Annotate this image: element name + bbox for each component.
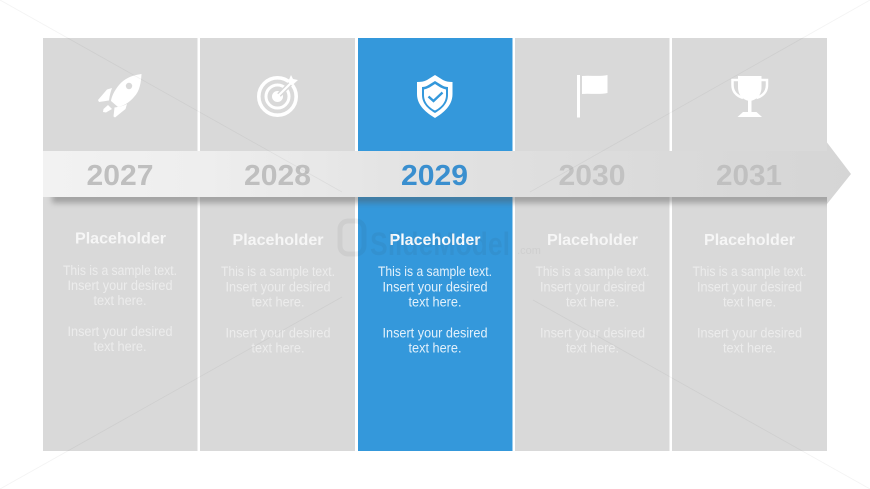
text block: 2031: Insert your desired: [697, 280, 802, 294]
text block: 2028: [221, 232, 335, 356]
watermark: diagonal lines and logo: SlideModel: [370, 226, 510, 262]
text block: 2030: Placeholder: [547, 232, 638, 249]
text block: 2027: text here.: [94, 339, 146, 354]
text block: 2029: text here.: [408, 340, 462, 356]
panel: 2031 column: [672, 38, 827, 451]
text block: 2030: This is a sample text.: [536, 264, 650, 279]
text block: 2028: This is a sample text.: [221, 264, 335, 279]
icon: rocket: [98, 74, 142, 118]
panel: 2030 column: [515, 38, 670, 451]
text block: 2027: text here.: [94, 293, 146, 308]
timeline arrow ribbon: [43, 142, 851, 204]
text block: 2029: text here.: [408, 294, 462, 310]
panel: 2027 column: [43, 38, 198, 451]
text block: 2029: Insert your desired: [382, 326, 488, 340]
text block: 2029: [378, 232, 492, 356]
watermark: diagonal lines and logo: .com: [517, 245, 541, 257]
icon: trophy: [732, 76, 767, 117]
text block: 2027: This is a sample text.: [63, 263, 177, 278]
text block: 2031: Placeholder: [704, 232, 795, 249]
text block: 2028: Placeholder: [232, 232, 324, 249]
year: 2031: 2031: [716, 160, 782, 192]
text block: 2031: This is a sample text.: [692, 264, 806, 279]
text block: 2028: Insert your desired: [226, 280, 330, 294]
text block: 2030: [536, 232, 650, 356]
year: 2027: 2027: [86, 160, 154, 192]
text block: 2031: [692, 232, 806, 356]
text block: 2027: Insert your desired: [68, 278, 172, 293]
text block: 2028: Insert your desired: [226, 326, 330, 340]
icon: flag: [577, 75, 608, 118]
text block: 2030: text here.: [566, 294, 619, 310]
text block: 2028: text here.: [252, 340, 304, 356]
panel: 2029 highlighted column: [358, 38, 512, 451]
text block: 2030: Insert your desired: [540, 326, 645, 340]
year: 2030: 2030: [558, 160, 626, 192]
text block: 2030: text here.: [566, 340, 619, 356]
year: 2029: 2029: [401, 160, 468, 192]
ribbon shadow: [52, 193, 842, 203]
icon: target: [259, 75, 298, 115]
text block: 2031: Insert your desired: [697, 326, 802, 340]
text block: 2031: text here.: [723, 340, 776, 356]
icon: shield with check: [417, 75, 452, 118]
panel: 2028 column: [200, 38, 355, 451]
text block: 2030: Insert your desired: [540, 280, 645, 294]
text block: 2028: text here.: [252, 294, 304, 310]
text block: 2027: Insert your desired: [68, 324, 172, 339]
text block: 2031: text here.: [723, 294, 776, 310]
text block: 2027: [63, 230, 177, 354]
year: 2028: 2028: [244, 160, 311, 192]
text block: 2029: Insert your desired: [382, 280, 488, 294]
text block: 2029: Placeholder: [390, 232, 480, 249]
text block: 2027: Placeholder: [75, 230, 166, 248]
text block: 2029: This is a sample text.: [378, 264, 492, 279]
